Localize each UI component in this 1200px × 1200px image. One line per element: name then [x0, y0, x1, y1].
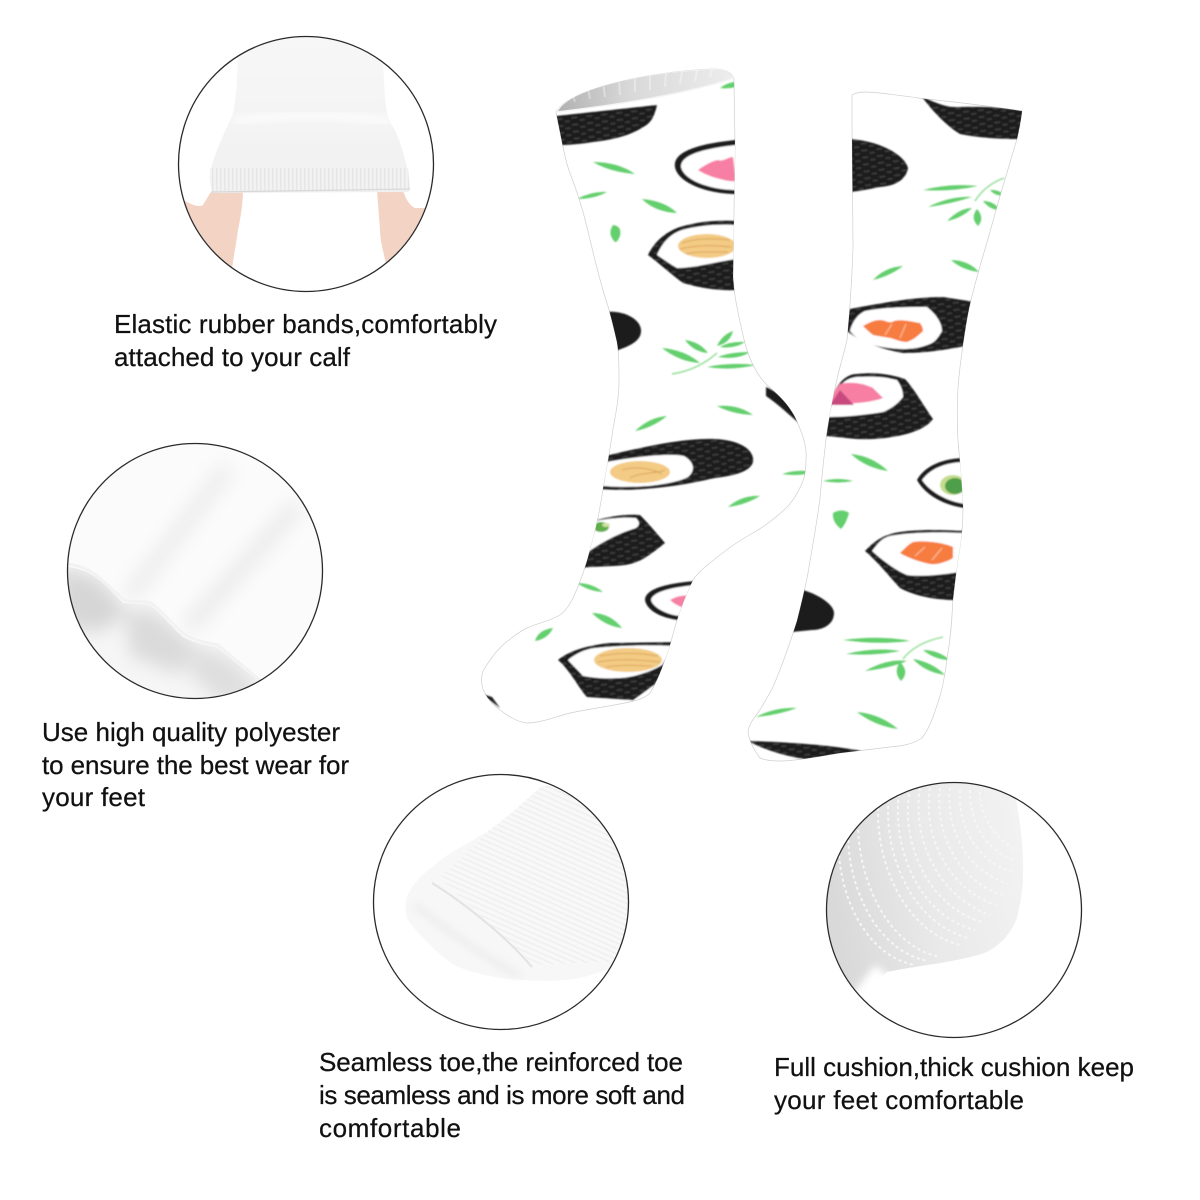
sock cuff — [210, 30, 410, 193]
sushi: big yellow log roll — [600, 439, 753, 490]
caption: full cushion: your feet comfortable — [774, 1085, 1024, 1115]
sushi: pink roll — [826, 373, 933, 439]
sushi: salmon roll top — [847, 297, 975, 353]
sushi: top nori — [556, 105, 657, 145]
sushi: green roll — [580, 515, 665, 568]
sushi: bottom sliver — [748, 741, 862, 759]
caption: elastic rubber bands: attached to your calf — [114, 342, 351, 372]
right sock — [748, 92, 1026, 761]
skin: right leg — [377, 192, 425, 262]
circle: full cushion — [820, 775, 1082, 1038]
sushi: nori half — [850, 139, 908, 192]
cuff ribs — [573, 71, 698, 102]
caption: high quality polyester: to ensure the best wear for — [42, 750, 349, 780]
toe seam — [432, 883, 532, 967]
leaves — [756, 260, 979, 729]
sushi: top nori — [922, 97, 1026, 139]
leaves — [535, 82, 806, 641]
bamboo sprig top — [923, 178, 1004, 226]
caption: high quality polyester — [42, 717, 349, 812]
caption: seamless toe: Seamless toe,the reinforced toe — [319, 1047, 683, 1077]
sushi: bottom yellow roll — [558, 642, 680, 700]
cushioned heel — [820, 775, 1023, 1010]
caption: seamless toe: is seamless and is more soft and — [319, 1080, 685, 1110]
bamboo sprig bottom — [843, 637, 950, 681]
circle: seamless toe — [374, 774, 640, 1030]
caption: elastic rubber bands — [114, 309, 497, 372]
sock toe — [406, 780, 640, 981]
caption: full cushion — [774, 1052, 1134, 1115]
bamboo sprig — [662, 331, 756, 374]
fold shadows under hem — [68, 567, 256, 696]
circle: elastic cuff — [178, 30, 434, 292]
sushi: small pink roll — [645, 581, 696, 620]
caption: high quality polyester: your feet — [42, 782, 146, 812]
caption: seamless toe: comfortable — [319, 1113, 461, 1143]
sushi: pink tuna roll — [675, 140, 736, 194]
rib band — [210, 168, 410, 193]
toe ribs — [440, 780, 640, 965]
caption: full cushion: Full cushion,thick cushion keep — [774, 1052, 1134, 1082]
left sock — [482, 69, 806, 723]
circle: polyester fabric — [66, 442, 324, 700]
skin: left leg — [180, 190, 243, 268]
shadow backdrop — [90, 638, 198, 698]
terry loops — [839, 788, 1017, 965]
sushi: salmon roll lower — [865, 530, 965, 600]
sushi: wasabi roll — [917, 458, 966, 508]
fold lines — [133, 476, 296, 624]
sushi: nori half lower — [792, 590, 834, 632]
sushi: yellow roll — [648, 221, 736, 290]
sushi: toe sliver — [486, 694, 500, 708]
cuff opening — [557, 69, 734, 112]
caption: high quality polyester: Use high quality polyester — [42, 717, 340, 747]
caption: elastic rubber bands: Elastic rubber bands,comfortably — [114, 309, 497, 339]
hem — [68, 564, 262, 682]
sushi: heel arc — [766, 387, 800, 424]
sushi: nori half — [606, 312, 641, 352]
fade at tail — [840, 965, 900, 1020]
fabric — [68, 560, 262, 679]
caption: seamless toe — [319, 1047, 685, 1143]
